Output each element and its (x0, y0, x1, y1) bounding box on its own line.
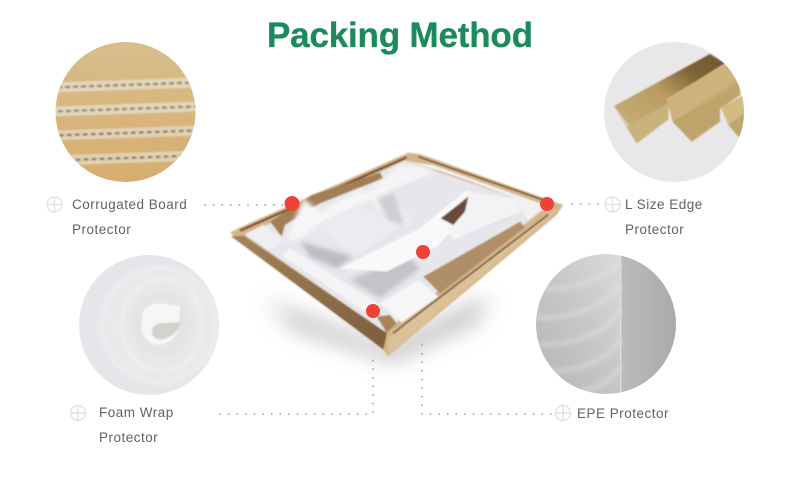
label: corrugated board protector (72, 197, 187, 237)
cardboard left back strip (270, 173, 383, 237)
panel: foam wrap photo (79, 255, 219, 395)
label: L size edge protector: Protector (625, 222, 684, 237)
icon: plus foam (70, 406, 86, 420)
connector: corrugated board (205, 204, 287, 206)
box left wall (231, 236, 387, 349)
icon: plus corrugated (47, 197, 62, 212)
label: corrugated board protector: Corrugated Board (72, 197, 187, 212)
panel: corrugated board photo (56, 42, 196, 182)
tissue right fold (447, 192, 522, 240)
label: corrugated board protector: Protector (72, 222, 131, 237)
lower corner cardboard (377, 315, 397, 333)
marker: top right (540, 197, 554, 211)
connector: foam wrap (220, 360, 373, 414)
dark gap (441, 197, 468, 225)
white long strip (282, 248, 380, 315)
white corner block bottom (380, 280, 438, 323)
white pad right (393, 178, 462, 212)
label: L size edge protector (625, 197, 703, 237)
tissue wrap top (367, 165, 433, 227)
marker: centre (416, 245, 430, 259)
tissue wrap left (287, 190, 377, 240)
white pad left (315, 205, 398, 257)
connector: EPE protector (422, 345, 555, 414)
title: Packing Method (267, 16, 533, 55)
panel: open packing box (230, 153, 563, 356)
box outer frame (230, 153, 563, 356)
connector: L size edge (572, 203, 600, 205)
panel: L size edge protector photo (600, 40, 750, 185)
cardboard right insert (423, 222, 525, 293)
box back wall left line (240, 157, 407, 231)
inner right rail (393, 215, 548, 333)
tissue band (340, 190, 483, 272)
white top right strip (407, 162, 545, 220)
label: foam wrap protector (99, 405, 174, 445)
panel: EPE protector photo (536, 254, 676, 394)
icon: plus EPE (556, 406, 570, 420)
icon: plus L size (605, 197, 620, 212)
label: foam wrap protector: Protector (99, 430, 158, 445)
label: L size edge protector: L Size Edge (625, 197, 703, 212)
label: EPE protector: EPE Protector (577, 406, 669, 421)
shadow under box (265, 295, 490, 362)
marker: top left (284, 196, 300, 211)
box right wall (388, 205, 563, 356)
box back wall right line (418, 157, 553, 203)
marker: bottom (366, 304, 380, 318)
label: foam wrap protector: Foam Wrap (99, 405, 174, 420)
white corner block left (245, 225, 283, 251)
box interior (245, 161, 545, 332)
folded shadows (300, 242, 353, 268)
